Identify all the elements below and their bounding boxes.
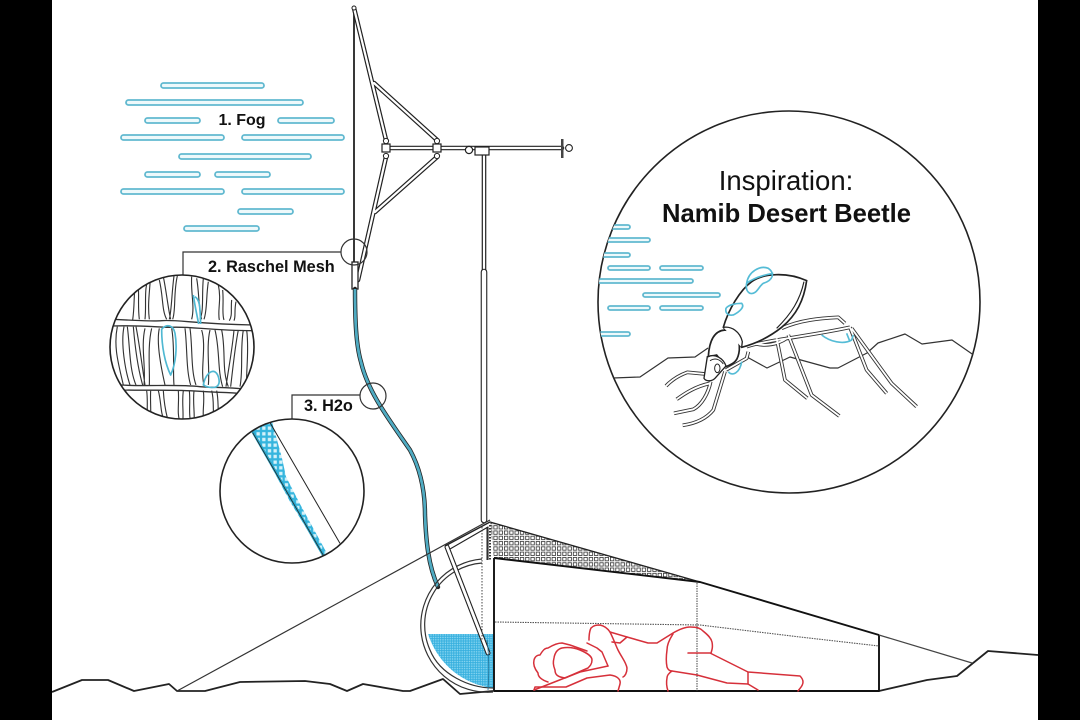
- panel: inspiration beetle circle: [590, 111, 980, 493]
- callout: raschel mesh leader: [183, 239, 367, 275]
- heading: 2. Raschel Mesh: 2. Raschel Mesh: [208, 258, 335, 276]
- heading: Namib Desert Beetle: Namib Desert Beetle: [662, 200, 911, 228]
- panel: raschel mesh magnified: [110, 273, 254, 422]
- panel: water droplet magnified: [220, 419, 364, 563]
- ground line: [52, 651, 1038, 694]
- fog collector mast and frame: [352, 6, 572, 520]
- inspiration fog and mountains: [590, 225, 975, 378]
- heading: Inspiration: Inspiration:: [719, 165, 853, 196]
- water hose: [355, 289, 438, 587]
- sleeping person: [534, 625, 803, 691]
- heading: 1. Fog: 1. Fog: [218, 112, 266, 129]
- callout: H2o leader: [292, 383, 386, 419]
- shelter shade mesh: [490, 522, 700, 582]
- fog bars: [121, 83, 344, 231]
- water tank: [421, 525, 494, 692]
- shelter structure: [177, 520, 972, 691]
- illustration: beetle: [666, 267, 917, 425]
- heading: 3. H2o: 3. H2o: [304, 397, 353, 415]
